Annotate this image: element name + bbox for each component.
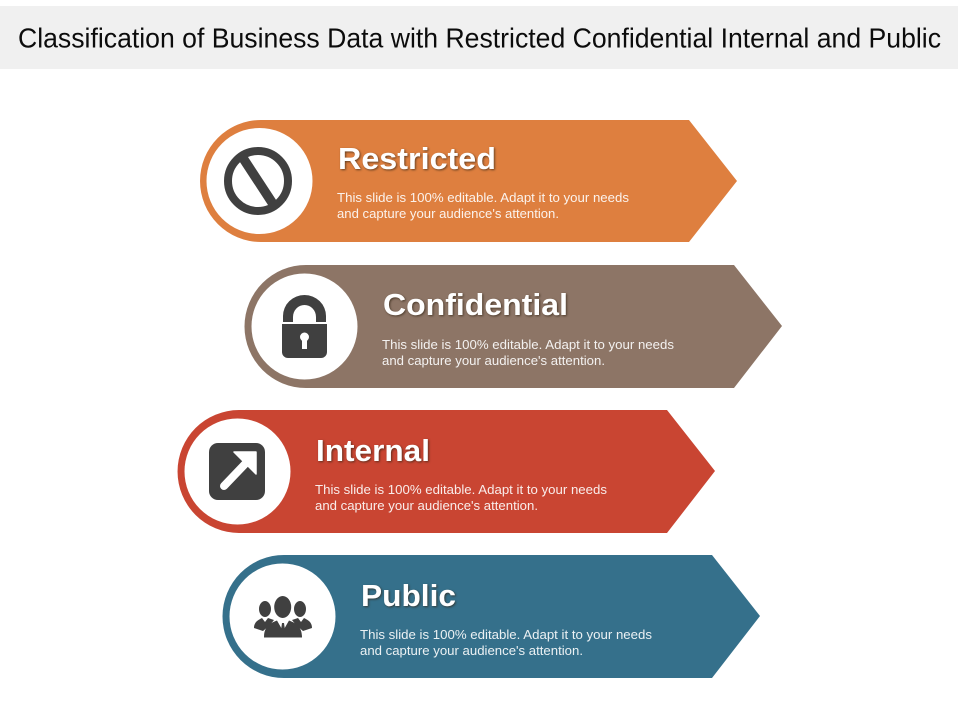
text: public description: This slide is 100% editable. Adapt it to your needs [360,627,652,642]
icon: prohibited sign [228,151,288,211]
heading: confidential: Confidential [383,287,568,322]
text: internal description: and capture your audience's attention. [315,498,538,513]
heading: restricted: Restricted [338,141,496,176]
text: restricted description [337,190,629,221]
title bar [0,6,958,69]
panel: restricted [200,120,737,242]
icon: business people [254,596,312,638]
text: confidential description [382,337,674,368]
text: restricted description: This slide is 100% editable. Adapt it to your needs [337,190,629,205]
heading: internal: Internal [316,433,430,468]
text: public description [360,627,652,658]
text: restricted description: and capture your audience's attention. [337,206,559,221]
icon: padlock [282,295,327,358]
text: internal description [315,482,607,513]
text: public description: and capture your audience's attention. [360,643,583,658]
panel: internal [178,410,715,533]
panel: confidential [244,265,782,388]
text: confidential description: and capture your audience's attention. [382,353,605,368]
text: internal description: This slide is 100% editable. Adapt it to your needs [315,482,607,497]
panel: public [222,555,760,678]
text: confidential description: This slide is 100% editable. Adapt it to your needs [382,337,674,352]
icon: arrow in square [209,443,265,500]
heading: public: Public [361,578,456,613]
